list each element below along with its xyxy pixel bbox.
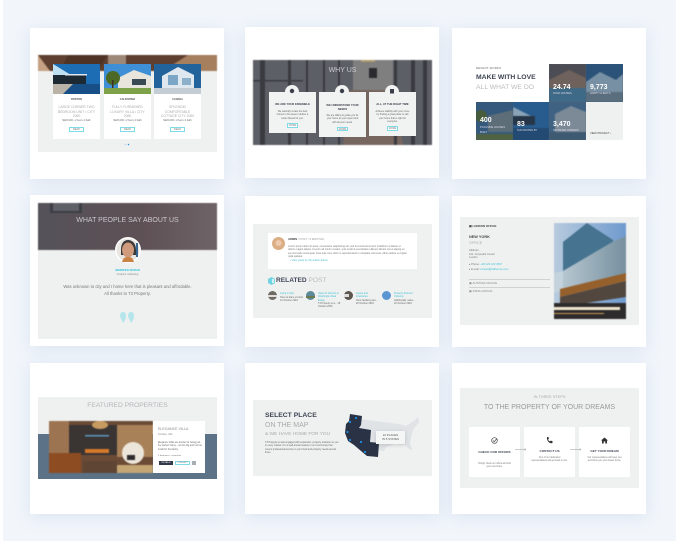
step 1 (469, 427, 520, 477)
related post 1 (268, 291, 304, 302)
heading: WHAT PEOPLE SAY ABOUT US (76, 217, 179, 224)
photo: glass office building (553, 222, 627, 320)
why card 2: We are willing to guide you for your home as you expect and with all your needs. (326, 114, 358, 124)
related post 2 (306, 291, 340, 308)
button (69, 127, 84, 132)
related post heading: RELATED POST (276, 277, 326, 284)
button (170, 127, 185, 132)
header photo (37, 202, 218, 251)
address: 101, Corporate Center (469, 253, 495, 256)
photo: living room (48, 420, 154, 474)
arrow 2 (570, 448, 581, 451)
map (345, 414, 419, 457)
office label: OFFICE (469, 241, 482, 245)
listing card 3: SPLENDID COMFORTABLE COTTAGE CITY 2060 (161, 105, 194, 118)
panel: blog author and related posts (245, 196, 439, 347)
panel: property listing (30, 28, 224, 179)
button: READ (73, 128, 80, 131)
body text: T3 Property is well engaged with expansion, property solutions to you in every market. It is a well-known feature in our community that covers professional service in your local and property needs across three. (265, 441, 338, 454)
panel: make with love stats (452, 28, 646, 179)
related post 3: Nunc facilisis justo... 20 October 2016 (356, 299, 378, 305)
phone: ▸ Phone: +00 123 123 4567 (469, 263, 502, 266)
quote: All thanks to T3 Property. (104, 291, 151, 296)
button: READ (124, 128, 131, 131)
highlighted western states (345, 414, 379, 457)
button: MORE (339, 128, 346, 131)
listing card 1: $120,000 • 2 bed • 2 bath (62, 119, 91, 122)
overline: RECENT WORKS (476, 66, 501, 70)
map callout (376, 431, 405, 444)
icon badge (285, 85, 299, 94)
stat tile 5: 3,470 (553, 121, 571, 128)
address (469, 249, 495, 259)
why card 1 (269, 92, 316, 133)
button: square (192, 461, 196, 465)
tagline: & WE HAVE HOME FOR YOU (265, 432, 330, 437)
stat tile 2 (586, 64, 623, 102)
subheading: ON THE MAP (265, 422, 308, 429)
avatar (115, 237, 141, 263)
address: Address: (469, 249, 479, 252)
button: dark (159, 461, 173, 465)
listing card 3: CANADA (172, 98, 183, 101)
address: London (469, 256, 478, 259)
stat tile 3 (476, 102, 513, 140)
author box: ADMIN / POST / 3 MONTHS (288, 237, 324, 241)
related post 1: Nunc at diam et tortor. 21 October 2016 (280, 296, 304, 302)
listing card 1: LARGE CORNER TWO BEDROOM UNIT • CITY 2060 (58, 105, 95, 118)
step 3 (579, 427, 630, 477)
button (387, 126, 398, 131)
related post 3 (344, 291, 378, 305)
button: contact (175, 461, 190, 465)
photo: modern white house (104, 64, 151, 94)
why card 2: WE UNDERSTAND YOUR NEEDS (326, 104, 359, 111)
button: MORE (289, 124, 296, 127)
stat tile 4 (513, 102, 549, 140)
listing card 2: CALIFORNIA (120, 98, 135, 101)
why card 1: WE ARE YOUR ENSEMBLE (275, 103, 310, 106)
author box: › View posts by the author admin (290, 259, 328, 262)
related post 3: Assets and Inheritance (356, 292, 368, 298)
stat tile 1: 24.74 (553, 84, 571, 91)
panel: select place on the map (245, 363, 439, 514)
listing card 2 (104, 64, 151, 139)
property info box: ELEGANCE VILLA (158, 427, 188, 431)
step 1: Simply check our offers and find your new home. (478, 463, 511, 468)
blue band (38, 434, 217, 479)
austria office: ▣ AUSTRIA OFFICE (469, 281, 497, 285)
icon: hexagon (268, 277, 275, 285)
photo: glass corridor (252, 59, 433, 146)
icon badge (385, 85, 399, 94)
button (120, 127, 135, 132)
button: READ (174, 128, 181, 131)
subheading: ALL WHAT WE DO (476, 84, 534, 90)
view more tile (586, 102, 623, 140)
step 2: CONTACT US (539, 449, 560, 453)
icon: phone (546, 437, 552, 444)
author box: Lorem ipsum dolor sit amet, consectetur adipisicing elit, sed do eiusmod tempor incididunt ut labore et dolore magna aliqua. Ut enim ad minim veniam, quis nostrud exercitation ullamco laboris nisi ut aliquip ex ea commodo consequat. Duis aute irure dolor in reprehenderit in voluptate velit esse cillum dolore eu fugiat nulla pariatur. (288, 245, 406, 258)
step 1: CHECK OUR OFFERS (478, 450, 511, 454)
USA silhouette (358, 417, 419, 451)
photo band: wood texture (37, 54, 218, 72)
panel: offices (452, 196, 646, 347)
button: dark: DETAILS (162, 462, 170, 464)
why card 3: ALL, AT THE RIGHT TIME (376, 103, 409, 106)
panel: three steps (452, 363, 646, 514)
overline: IN THREE STEPS (534, 394, 565, 399)
quote (63, 284, 192, 296)
name: JENNIFER MURAD (115, 268, 140, 272)
map callout: 10 PLACES (383, 433, 398, 437)
heading: SELECT PLACE (265, 412, 317, 419)
stat tile 4: 83 (517, 121, 525, 128)
carousel dots (124, 144, 130, 146)
panel: testimonial (30, 195, 224, 346)
stat tile 5: SATISFIED OWNERS (553, 129, 579, 132)
related post 2: Value for Doctors in Washington Real Estate (318, 292, 339, 302)
listing card 1: BOSTON (71, 98, 82, 101)
map callout: IN 5 STATES (382, 437, 399, 441)
button: MORE (389, 127, 396, 130)
button (337, 127, 348, 131)
panel: featured properties (30, 363, 224, 514)
quote: Was unknown to city and I home here that is pleasant and affordable. (63, 284, 192, 289)
property info box: Fontana, USA (158, 434, 172, 436)
heading: TO THE PROPERTY OF YOUR DREAMS (484, 404, 615, 411)
why card 3: Achieve stability with your move by finding a great place to call your home that is right for everyone. (376, 110, 409, 123)
stat tile 2: HAPPY CLIENTS (590, 92, 610, 95)
property info box (153, 421, 205, 473)
city: NEW YORK (469, 235, 490, 239)
heading: FEATURED PROPERTIES (87, 402, 168, 409)
india office: ▣ INDIA OFFICE (469, 289, 492, 293)
step 3: Our representatives will meet you and show you your dream home. (587, 457, 622, 462)
listing card 3 (154, 64, 201, 139)
stat tile 1: SOLD HOUSES (553, 92, 572, 95)
role: Creative marketing (117, 273, 138, 276)
related post 1: Living in Italy (280, 292, 294, 295)
related post 2: T3 Property is a... 18 October 2016 (318, 302, 340, 308)
listing card 3: $120,000 • 2 bed • 2 bath (163, 119, 192, 122)
icon: quote mark (120, 312, 134, 323)
office heading: ▣ LONDON OFFICE (469, 224, 496, 228)
stat tile 2: 9,773 (590, 84, 608, 91)
button (287, 123, 298, 128)
heading: MAKE WITH LOVE (476, 74, 536, 81)
related post 4 (382, 291, 415, 305)
why card 2 (319, 92, 366, 137)
arrow 1 (515, 448, 526, 451)
photo: glass house (154, 64, 201, 94)
panel: why us (245, 27, 439, 178)
button: contact: CONTACT (177, 462, 188, 464)
author photo (272, 237, 285, 250)
related post 4: Additionally, value... 20 October 2016 (394, 299, 415, 305)
heading: WHY US (329, 67, 356, 74)
related post 4: Property Protocol Ordering (394, 292, 412, 298)
stat tile 3: POOLSIDE HOUSES BUILT (480, 126, 505, 134)
icon badge (335, 85, 349, 94)
stat tile 5 (549, 102, 586, 140)
step 2 (524, 427, 575, 477)
step 2: One of our dedicated representatives will get back to you. (531, 457, 568, 462)
why card 3 (369, 92, 416, 136)
photo: poolside villa (53, 64, 100, 94)
why card 1: We carefully curate the best homes in the area to deliver a better Result for you. (277, 110, 308, 120)
listing card 1 (53, 64, 100, 139)
listing card 2: $120,000 • 2 bed • 2 bath (113, 119, 142, 122)
email: ▸ E-mail: contact@t3themes.com (469, 268, 508, 271)
property info box: 4 bedrooms • waterfront (158, 455, 181, 457)
stat tile 1 (549, 64, 586, 102)
listing card 2: FULLY FURNISHED LUXURY VILLA • CITY 2060 (110, 105, 145, 118)
icon: house (601, 438, 608, 444)
stat tile 4: SUN ROOMS BY (517, 129, 537, 132)
property info box: Elegance Villas are known for being just the perfect home - not too big and not too small for the family. (158, 441, 202, 451)
author box (268, 233, 417, 269)
view more tile: VIEW PROJECT › (590, 132, 611, 135)
step 3: GET YOUR DREAM (590, 449, 619, 453)
icon: check circle (491, 437, 498, 444)
stat tile 3: 400 (480, 117, 492, 124)
